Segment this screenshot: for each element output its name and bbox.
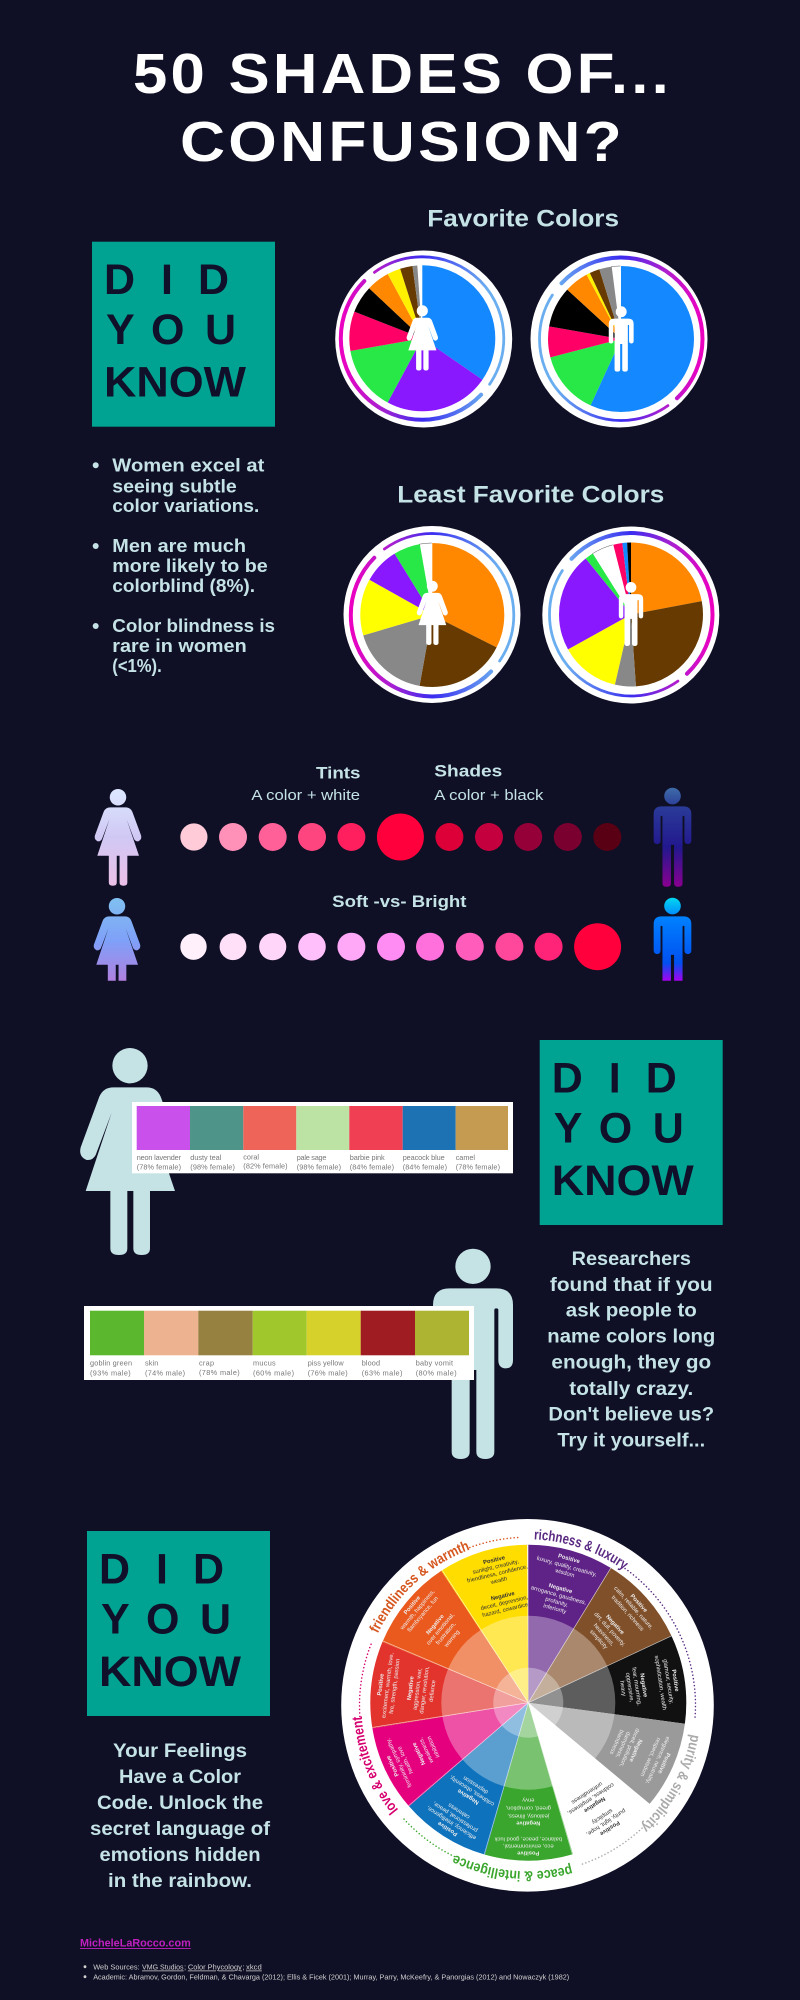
brown sector text (577, 1581, 659, 1663)
panel: colors women name: pale sage (297, 1153, 326, 1162)
yellow sector text: hazard, cowardice. (482, 1602, 531, 1619)
title: 50 SHADES OF... (133, 42, 672, 106)
footer sources: Web Sources: (93, 1962, 140, 1972)
footer sources (84, 1962, 570, 1982)
black sector text: Negative (638, 1673, 648, 1699)
brown sector text: dirt, dull, poverty, (592, 1612, 626, 1648)
orange sector text: warning (443, 1629, 461, 1650)
panel: colors men name: blood (362, 1358, 380, 1368)
yellow sector text: sunlight, creativity, (472, 1559, 520, 1576)
label: shades (434, 762, 544, 804)
blue sector text: depression (462, 1774, 490, 1795)
purple sector text: arrogance, gaudiness, (530, 1585, 587, 1607)
panel: did you know box 1 (92, 242, 275, 427)
brown sector text: calm, reliable, nature, (612, 1586, 654, 1631)
black sector text: Positive (670, 1669, 679, 1693)
blue sector text: calmness (447, 1801, 471, 1820)
red sector text: danger, revolution, (419, 1666, 431, 1714)
black sector text: glamour, security, (661, 1659, 674, 1705)
pie chart: men's favorite colors (530, 250, 708, 428)
white sector text: Positive (598, 1819, 620, 1837)
orange sector text (394, 1584, 471, 1661)
yellow sector text: friendliness, confidence, (467, 1564, 529, 1585)
green sector text: Negative (515, 1820, 540, 1826)
orange sector text: flamboyance, fun (407, 1596, 440, 1633)
pie chart: men's least favorite colors (542, 526, 719, 704)
curved label: purity and simplicity: purity & simplicity (642, 1734, 698, 1832)
white sector text: unfriendliness (570, 1780, 603, 1805)
brown sector text: Positive (629, 1593, 648, 1615)
yellow sector text (463, 1550, 537, 1621)
blue sector text: Negative (456, 1787, 480, 1805)
panel: colors men name: (60% male) (253, 1368, 294, 1377)
icon: large man (433, 1249, 513, 1459)
blue sector text: coldness, obscenity, (449, 1774, 496, 1807)
panel: colors men name: crap (199, 1358, 214, 1367)
text block: feelings paragraph: secret language of (90, 1819, 271, 1840)
magenta sector text: Positive (386, 1754, 401, 1777)
panel: colors women name (132, 1102, 513, 1173)
panel: colors women name: neon lavender (137, 1153, 182, 1162)
icon: woman (417, 581, 448, 645)
panel: colors women name: (78% female) (456, 1162, 500, 1171)
dotted leaders (355, 1530, 742, 1875)
icon: dark man figure (654, 788, 691, 887)
panel: colors women name: (84% female) (350, 1162, 394, 1171)
gray sector text: Positive (656, 1752, 671, 1775)
gray sector text: elegance, neutrality, (644, 1735, 670, 1785)
purple sector text: Positive (557, 1553, 581, 1565)
icon: blue woman figure (94, 898, 140, 981)
footer sources: xkcd (246, 1962, 262, 1972)
panel: colors men name: baby vomit (416, 1358, 453, 1368)
purple sector text (524, 1548, 600, 1621)
panel: colors men name: (93% male) (90, 1368, 131, 1377)
panel: colors men name: (80% male) (416, 1368, 457, 1377)
chart: tints and shades dots (180, 814, 621, 860)
bullet list: colour perception facts (93, 455, 275, 676)
bullet list: colour perception facts: more likely to be (112, 555, 268, 576)
green sector text (495, 1797, 562, 1856)
pie chart: women's least favorite colors (344, 526, 520, 703)
magenta sector text: inhibition (426, 1735, 442, 1758)
text block: researchers paragraph: Try it yourself... (557, 1431, 705, 1452)
brown sector text: tradition, richness (610, 1595, 645, 1633)
panel: colors women name: (98% female) (190, 1162, 235, 1171)
text block: feelings paragraph: Code. Unlock the (97, 1793, 263, 1814)
green sector text: balance, peace, good luck (495, 1836, 562, 1842)
wheel sectors (449, 1624, 607, 1782)
red sector text: fire, strength, passion (389, 1658, 402, 1714)
heading: favorite colors: Favorite Colors (427, 206, 619, 233)
footer sources: Color Phycology (188, 1962, 242, 1972)
gray sector text: deceit, pollution, (617, 1727, 640, 1768)
magenta sector text: weakness, (418, 1736, 436, 1765)
footer sources: ; (184, 1962, 186, 1972)
magenta sector text: femininity, sympathy, (385, 1737, 414, 1788)
footer sources: ; (242, 1962, 245, 1972)
orange sector text: warmth, happiness, (399, 1589, 437, 1632)
white sector text: purity, light, hope, (585, 1807, 626, 1837)
label: shades: Shades (434, 762, 502, 780)
red sector text: Positive (377, 1672, 386, 1696)
blue sector text: professional, peace, (432, 1800, 479, 1833)
panel: colors men name: skin (145, 1358, 158, 1368)
gray sector text: dampness, (614, 1730, 631, 1759)
panel: colors women name: dusty teal (190, 1153, 222, 1162)
title: CONFUSION? (180, 110, 625, 174)
text block: researchers paragraph (547, 1249, 715, 1452)
black sector text: heavy (618, 1680, 626, 1697)
footer sources: VMG Studios (142, 1962, 184, 1972)
text block: feelings paragraph: Have a Color (119, 1767, 242, 1788)
black sector text: sophistication, wealth (653, 1655, 667, 1711)
icon: large woman (80, 1048, 180, 1255)
orange sector text: Negative (426, 1613, 446, 1636)
icon: man (609, 306, 634, 372)
bullet list: colour perception facts: seeing subtle (112, 475, 237, 496)
panel: did you know box 1: Y O U (106, 306, 236, 354)
panel: colors men name (84, 1306, 474, 1380)
panel: colors women name: camel (456, 1153, 475, 1162)
gray sector text: respect, wisdom (638, 1736, 661, 1777)
curved label: peace and intelligence: peace & intelligence (453, 1856, 572, 1882)
red sector text: excitement, warmth, love, (381, 1652, 395, 1719)
bullet list: colour perception facts: rare in women (112, 635, 247, 656)
title (133, 42, 672, 174)
green sector text: envy (522, 1797, 534, 1803)
curved label: friendliness and warmth: friendliness & warmth (369, 1542, 470, 1633)
curved label: richness and luxury: richness & luxury (534, 1529, 628, 1570)
red sector text: Negative (407, 1675, 416, 1701)
bullet list: colour perception facts: Men are much (112, 535, 246, 556)
panel: colors women name: (98% female) (297, 1162, 341, 1171)
white sector text: coldness, emptiness, (566, 1781, 615, 1816)
yellow sector text: deceit, depression, (480, 1595, 529, 1612)
gray sector text (603, 1717, 677, 1788)
label: tints (251, 764, 360, 804)
green sector text: eco, environmental, (503, 1843, 554, 1849)
brown sector text: heaviness, (592, 1623, 615, 1648)
label: shades: A color + black (434, 788, 544, 804)
orange sector text: frustration, (435, 1621, 458, 1646)
green sector text: greed, corruption, (505, 1805, 551, 1811)
red sector text: defiance (429, 1680, 437, 1702)
text block: feelings paragraph (90, 1741, 271, 1892)
text block: researchers paragraph: found that if you (550, 1275, 713, 1296)
panel: did you know box 1: D I D (104, 256, 229, 304)
footer sources: Academic: Abramov, Gordon, Feldman, & Chavarga (2012); Ellis & Ficek (2001); Murray, Parry, McKeefry, & Panorgias (2012) and Nowaczyk (1982) (93, 1972, 570, 1982)
icon: pale woman figure (95, 789, 141, 886)
red sector text: aggression, war, (413, 1667, 424, 1710)
panel: did you know box 3: Y O U (101, 1595, 231, 1643)
panel: did you know box 3: D I D (99, 1545, 224, 1593)
bullet list: colour perception facts: Color blindness is (112, 615, 275, 636)
brown sector text: Negative (604, 1614, 625, 1637)
panel: colors men name: goblin green (90, 1358, 132, 1368)
white sector text (562, 1775, 634, 1845)
panel: did you know box 1: KNOW (104, 359, 246, 407)
panel: did you know box 3: KNOW (99, 1648, 241, 1696)
white sector text: Negative (582, 1795, 606, 1814)
text block: researchers paragraph: totally crazy. (569, 1379, 693, 1400)
icon: bright man figure (654, 898, 692, 981)
orange sector text: Positive (403, 1595, 423, 1616)
white sector text: simplicity (590, 1807, 613, 1825)
blue sector text: Positive (436, 1819, 459, 1837)
panel: colors men name: (63% male) (362, 1368, 402, 1377)
panel: colors women name: (82% female) (243, 1162, 288, 1171)
text block: feelings paragraph: emotions hidden (100, 1845, 260, 1866)
yellow sector text: wealth (489, 1576, 508, 1586)
orange sector text: over emotional, (426, 1612, 456, 1647)
panel: colors women name: (84% female) (403, 1162, 447, 1171)
footer link: MicheleLaRocco.com (80, 1938, 191, 1950)
panel: colors women name: barbie pink (350, 1153, 385, 1162)
panel: colors women name: peacock blue (403, 1153, 445, 1162)
text block: feelings paragraph: Your Feelings (113, 1741, 247, 1762)
chart: soft to bright dots (180, 923, 621, 970)
label: soft vs bright: Soft -vs- Bright (332, 892, 467, 911)
text block: researchers paragraph: Researchers (572, 1249, 691, 1270)
blue sector text: efficiency, intelligence, (426, 1804, 478, 1840)
curved label: love and excitement: love & excitement (352, 1716, 398, 1816)
bullet list: colour perception facts: color variations. (112, 495, 259, 516)
blue sector text (422, 1766, 502, 1846)
panel: colors women name: (78% female) (137, 1162, 181, 1171)
bullet list: colour perception facts: (<1%). (112, 655, 162, 676)
black sector text: oppressive, (624, 1672, 634, 1703)
panel: colors men name: piss yellow (308, 1358, 344, 1368)
icon: woman (407, 305, 438, 371)
black sector text: fear, mourning, (630, 1667, 642, 1706)
panel: colors men name: (74% male) (145, 1368, 185, 1377)
text block: researchers paragraph: enough, they go (551, 1353, 711, 1374)
text block: researchers paragraph: name colors long (547, 1327, 715, 1348)
magenta sector text: health, love (397, 1745, 415, 1774)
panel: did you know box 2: KNOW (552, 1157, 694, 1205)
purple sector text: wisdom (553, 1568, 575, 1579)
panel: did you know box 3 (87, 1531, 270, 1716)
red sector text (374, 1651, 440, 1724)
panel: did you know box 2: D I D (552, 1054, 677, 1102)
chart: color emotion wheel (341, 1519, 714, 1892)
text block: feelings paragraph: in the rainbow. (108, 1871, 252, 1892)
panel: did you know box 2: Y O U (554, 1104, 684, 1152)
purple sector text: inferiority (542, 1603, 567, 1615)
panel: colors men name: (76% male) (308, 1368, 348, 1377)
label: tints: Tints (316, 764, 360, 782)
gray sector text: blandness (608, 1728, 624, 1755)
green sector text: Positive (516, 1850, 539, 1856)
black sector text (615, 1653, 682, 1716)
yellow sector text: Negative (490, 1591, 516, 1602)
purple sector text: luxury, quality, creativity, (536, 1556, 598, 1578)
bullet list: colour perception facts: colorblind (8%). (112, 575, 255, 596)
yellow sector text: Positive (483, 1555, 506, 1566)
text block: researchers paragraph: Don't believe us? (548, 1405, 714, 1426)
pie chart: women's favorite colors (335, 250, 512, 428)
text block: researchers paragraph: ask people to (566, 1301, 697, 1322)
heading: least favorite colors: Least Favorite Colors (397, 482, 664, 509)
icon: man (619, 582, 643, 646)
purple sector text: profanity, (544, 1597, 569, 1609)
bullet list: colour perception facts: Women excel at (112, 455, 264, 476)
green sector text: jealousy, illness, (507, 1813, 550, 1819)
panel: colors men name: mucus (253, 1358, 276, 1368)
purple sector text: Negative (548, 1583, 574, 1596)
gray sector text: Negative (627, 1738, 643, 1763)
brown sector text: simplicity (588, 1629, 608, 1651)
panel: did you know box 2 (540, 1040, 723, 1225)
panel: colors women name: coral (243, 1152, 259, 1161)
label: tints: A color + white (251, 788, 360, 804)
magenta sector text: Negative (411, 1740, 427, 1766)
panel: colors men name: (78% male) (199, 1368, 240, 1377)
magenta sector text (379, 1721, 448, 1791)
